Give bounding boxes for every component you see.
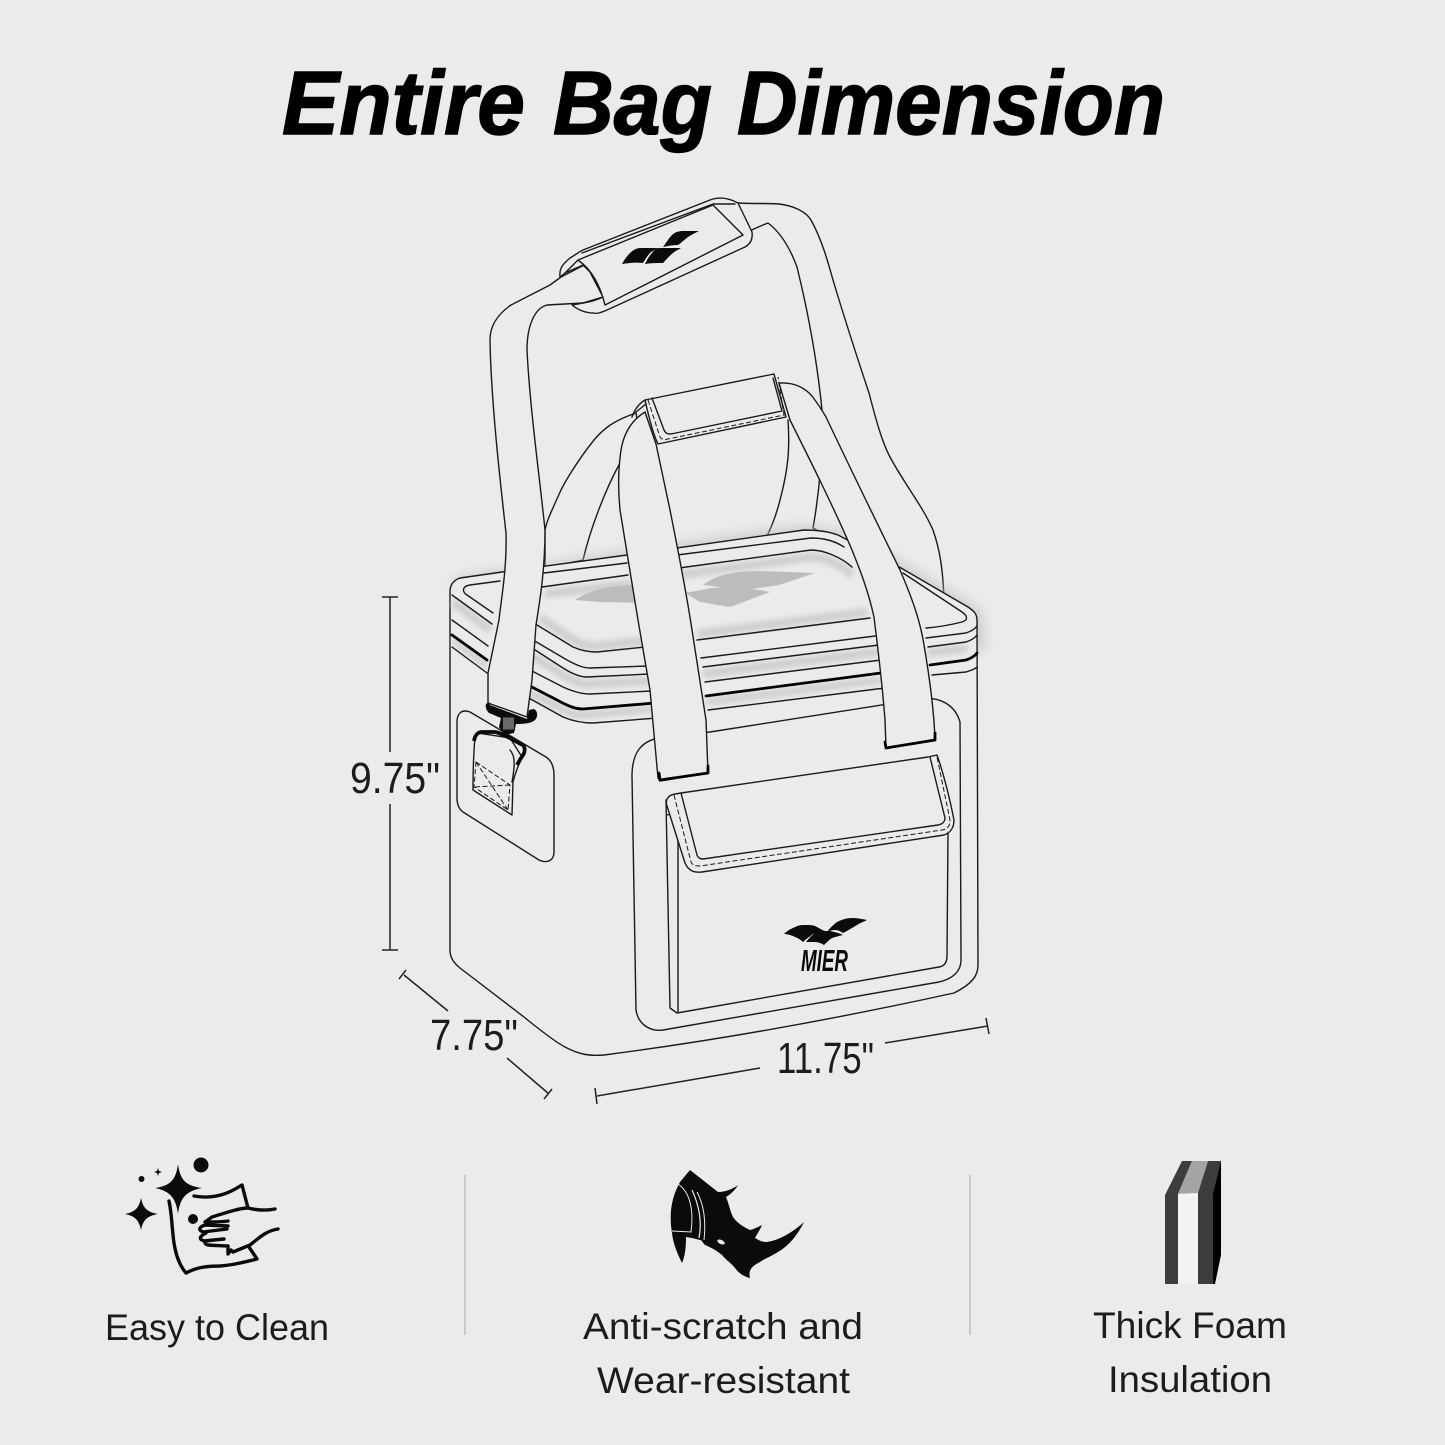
lid shadow: [456, 533, 978, 650]
shoulder strap: front section: [488, 262, 610, 717]
icon: rhino head: [671, 1170, 804, 1278]
bag body: [450, 530, 978, 1055]
pocket: [666, 755, 954, 1013]
brand logo: MIER: [801, 943, 848, 978]
lid logo (gray): [575, 571, 815, 607]
icon: cleaning cloth and sparkles: [125, 1158, 278, 1273]
rear carry handle: [545, 413, 789, 568]
title: Bag: [553, 54, 712, 154]
feature: easy to clean: [105, 1158, 329, 1348]
feature: thick foam: [1093, 1160, 1287, 1400]
grip logo: [622, 231, 699, 264]
depth dimension: [399, 970, 552, 1099]
height dimension: 9.75": [350, 754, 440, 803]
lid rim and zipper lines: [452, 538, 977, 723]
brand logo: [784, 918, 867, 978]
title: Entire: [282, 54, 525, 154]
label: Easy to Clean: [105, 1307, 329, 1348]
label line 2: Wear-resistant: [597, 1360, 851, 1401]
shoulder strap: rear section: [738, 203, 944, 600]
side panel: [457, 711, 554, 862]
title: Dimension: [737, 54, 1165, 154]
bag illustration: [450, 198, 978, 1055]
feature: anti-scratch: [583, 1170, 863, 1401]
carry handle: front right strap: [779, 383, 935, 748]
pocket flap: [666, 755, 954, 872]
icon: foam layers: [1165, 1160, 1221, 1284]
width dimension: [595, 1018, 989, 1104]
carry handle: flap: [632, 374, 786, 444]
carry handle: front left strap: [619, 412, 708, 781]
height dimension: [350, 597, 440, 950]
strap tips: [659, 733, 935, 780]
lid soft shading: [453, 557, 968, 715]
title: [282, 54, 1165, 154]
width dimension: 11.75": [777, 1034, 874, 1083]
grip wrap: [560, 198, 752, 313]
front panel: [632, 698, 961, 1030]
buckle and webbing: [473, 702, 537, 815]
label line 2: Insulation: [1108, 1359, 1272, 1400]
depth dimension: 7.75": [430, 1011, 518, 1060]
label: Thick Foam: [1093, 1305, 1287, 1346]
label: Anti-scratch and: [583, 1306, 863, 1347]
divider right: [970, 1175, 971, 1335]
divider left: [464, 1175, 466, 1335]
